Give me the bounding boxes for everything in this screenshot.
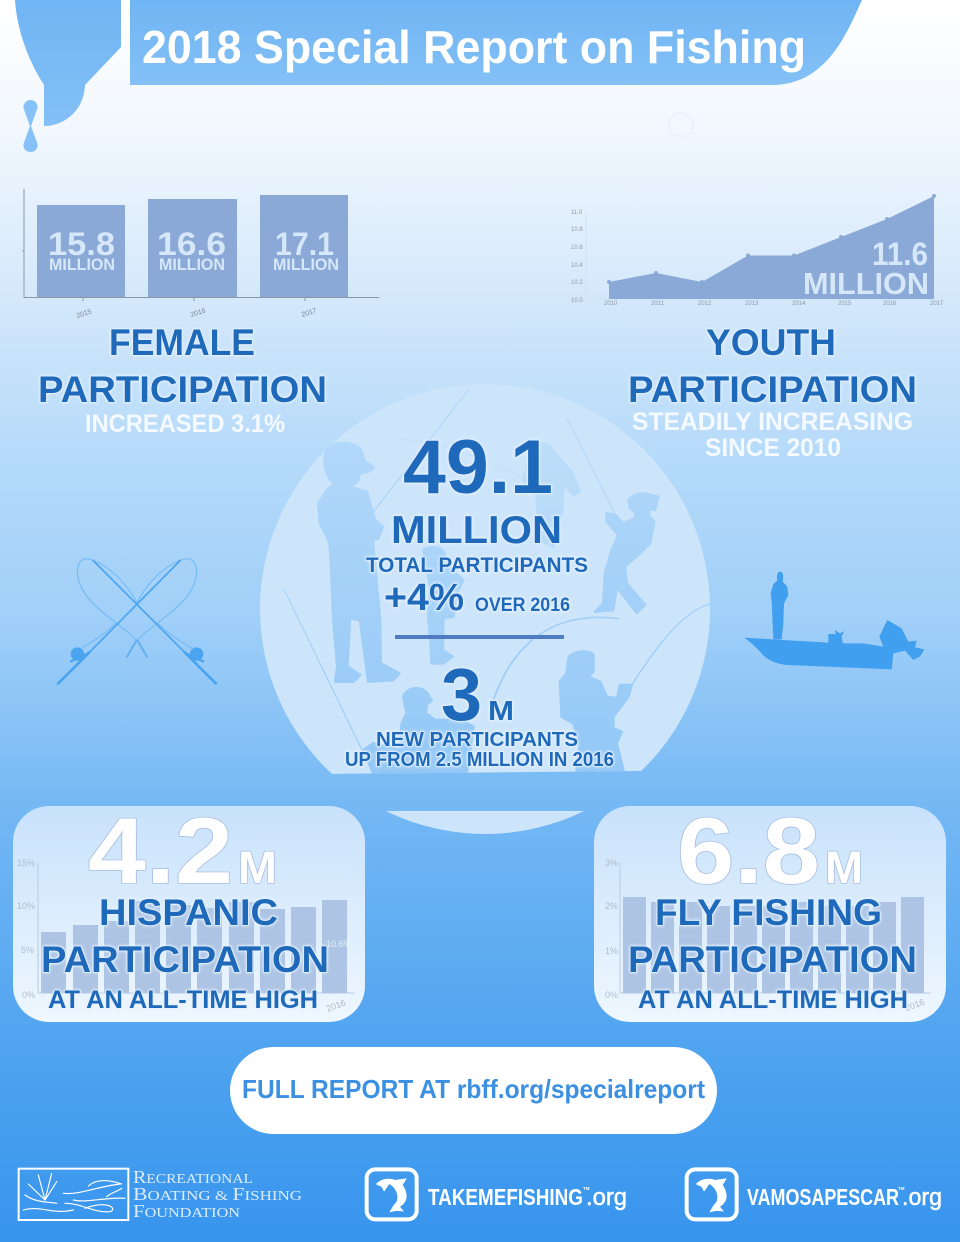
- caption: steadily increasing: SINCE 2010: [705, 434, 841, 462]
- faint bar chart: hispanic: 10.6%: [326, 939, 352, 949]
- logo wordmark: BOATING & FISHING: [133, 1184, 302, 1204]
- faint bar chart: hispanic: [17, 858, 355, 1014]
- logo: vamosapescar: [687, 1169, 942, 1219]
- bar chart: female participation: MILLION: [273, 256, 339, 274]
- label: total participants: TOTAL PARTICIPANTS: [366, 554, 588, 577]
- label: million: MILLION: [391, 509, 562, 552]
- bar chart: female participation: [22, 189, 379, 320]
- area chart: youth participation: 10.6: [571, 245, 583, 251]
- call to action pill: FULL REPORT AT rbff.org/specialreport: [242, 1074, 705, 1104]
- bar chart: female participation: MILLION: [49, 256, 115, 274]
- icon: dolphin badge: [687, 1169, 737, 1219]
- area chart: youth participation: 2017: [930, 301, 944, 307]
- logo: recreational boating and fishing foundation: [19, 1167, 302, 1221]
- silhouettes of anglers: [284, 390, 710, 773]
- logo: takemefishing: [367, 1169, 627, 1219]
- stat: +4% over 2016: +4%: [384, 577, 464, 619]
- panel: fly fishing participation: [594, 798, 946, 1022]
- number 4.2M: 4.2: [88, 798, 233, 903]
- faint bar chart: hispanic: 10%: [17, 901, 35, 911]
- faint bar chart: fly fishing: 2016: [904, 997, 926, 1013]
- area chart: youth participation: 2010: [604, 301, 618, 307]
- heading: fly fishing participation: [628, 892, 917, 980]
- area chart: youth participation: 10.2: [571, 280, 583, 286]
- logo wordmark: [133, 1167, 302, 1221]
- icon: dolphin badge: [367, 1169, 417, 1219]
- caption: increased 3.1%: INCREASED 3.1%: [85, 410, 285, 438]
- icon: crossed fishing rods: [57, 559, 217, 684]
- area chart: youth participation: 10.8: [571, 227, 583, 233]
- area chart: youth participation: 2014: [792, 301, 806, 307]
- faint circle decoration: [669, 113, 693, 137]
- heading: youth participation: PARTICIPATION: [628, 369, 917, 410]
- logo wordmark: .org: [902, 1184, 942, 1211]
- faint bar chart: hispanic: 0%: [22, 990, 35, 1000]
- caption: steadily increasing: [632, 408, 913, 462]
- area chart: youth participation: 2013: [745, 301, 759, 307]
- big number 3M: M: [488, 695, 514, 726]
- area chart: youth participation: 11.6: [872, 236, 928, 272]
- area chart: youth participation: 10.0: [571, 298, 583, 304]
- panel background: [13, 806, 365, 1022]
- panel: youth participation: [571, 194, 944, 462]
- logo wordmark: VAMOSAPESCAR: [747, 1184, 899, 1210]
- area chart: youth participation: 10.4: [571, 263, 583, 269]
- panel: hispanic participation: [13, 798, 365, 1022]
- area chart: youth participation: 11.0: [571, 210, 583, 216]
- icon: water droplet: [23, 100, 38, 152]
- panel background: [594, 806, 946, 1022]
- footer logos: [19, 1167, 942, 1221]
- icon: hook shape at top left: [15, 0, 121, 126]
- heading: fly fishing participation: FLY FISHING: [655, 892, 882, 933]
- logo mark: [19, 1169, 128, 1220]
- stat: +4% over 2016: [384, 577, 570, 619]
- heading: hispanic participation: [41, 892, 329, 980]
- heading: hispanic participation: HISPANIC: [99, 892, 278, 933]
- banner shape: [130, 0, 862, 85]
- logo wordmark: FOUNDATION: [133, 1201, 240, 1221]
- caption: all-time high: AT AN ALL-TIME HIGH: [638, 986, 908, 1014]
- title: 2018 Special Report on Fishing: [142, 21, 806, 73]
- bar chart: female participation: MILLION: [159, 256, 225, 274]
- logo wordmark: TAKEMEFISHING: [428, 1184, 583, 1210]
- icon: fisherman on boat: [744, 572, 924, 669]
- divider line: [395, 635, 564, 639]
- area chart: youth participation: 2011: [651, 301, 665, 307]
- label: new participants: NEW PARTICIPANTS: [376, 729, 578, 751]
- area chart: youth participation: 2016: [883, 301, 897, 307]
- header banner: [130, 0, 862, 85]
- number 6.8M: 6.8: [677, 798, 820, 903]
- bar chart: female participation: 2016: [190, 307, 207, 319]
- faint bar chart: hispanic: 15%: [17, 858, 35, 868]
- faint bar chart: hispanic: 5%: [21, 945, 34, 955]
- bar chart: female participation: 15.8: [48, 226, 115, 262]
- number 6.8M: M: [825, 842, 863, 893]
- logo wordmark: TM: [583, 1186, 590, 1191]
- area chart: youth participation: [571, 194, 944, 307]
- faint bar chart: fly fishing: 3%: [605, 858, 618, 868]
- heading: female participation: [38, 322, 327, 410]
- panel: central circle: [260, 384, 710, 834]
- circle with anglers: [260, 384, 710, 834]
- label: up from 2.5 million: UP FROM 2.5 MILLION IN 2016: [345, 749, 614, 771]
- faint bar chart: fly fishing: 2%: [605, 901, 618, 911]
- number 4.2M: M: [238, 842, 277, 893]
- call to action pill: [230, 1047, 717, 1134]
- big number 49.1: 49.1: [403, 425, 553, 510]
- heading: fly fishing participation: PARTICIPATION: [628, 939, 917, 980]
- logo wordmark: TM: [898, 1186, 905, 1191]
- big number 3M: 3: [441, 653, 482, 736]
- panel: female participation: [22, 189, 379, 438]
- faint bar chart: fly fishing: [605, 858, 931, 1013]
- bar chart: female participation: 2015: [76, 308, 93, 320]
- heading: hispanic participation: PARTICIPATION: [41, 939, 329, 980]
- faint bar chart: fly fishing: 1%: [605, 946, 618, 956]
- stat: +4% over 2016: OVER 2016: [475, 595, 570, 616]
- logo wordmark: RECREATIONAL: [133, 1167, 253, 1187]
- area chart: youth participation: 2012: [698, 301, 712, 307]
- big number 3M: [441, 653, 514, 736]
- bar chart: female participation: 16.6: [157, 226, 226, 262]
- caption: steadily increasing: STEADILY INCREASING: [632, 408, 913, 436]
- area chart: youth participation: 2015: [838, 301, 852, 307]
- heading: youth participation: YOUTH: [706, 322, 836, 363]
- faint bar chart: fly fishing: 0%: [605, 990, 618, 1000]
- total participants figures: [366, 425, 588, 619]
- caption: all-time high: AT AN ALL-TIME HIGH: [48, 986, 318, 1014]
- new participants figures: [345, 653, 614, 771]
- number 4.2M: [88, 798, 277, 903]
- logo wordmark: .org: [586, 1184, 627, 1211]
- heading: female participation: FEMALE: [109, 322, 255, 363]
- heading: female participation: PARTICIPATION: [38, 369, 327, 410]
- bar chart: female participation: 17.1: [275, 226, 334, 262]
- area chart: youth participation: MILLION: [803, 266, 929, 301]
- faint bar chart: hispanic: 2016: [325, 998, 347, 1014]
- bar chart: female participation: 2017: [301, 307, 318, 319]
- heading: youth participation: [628, 322, 917, 410]
